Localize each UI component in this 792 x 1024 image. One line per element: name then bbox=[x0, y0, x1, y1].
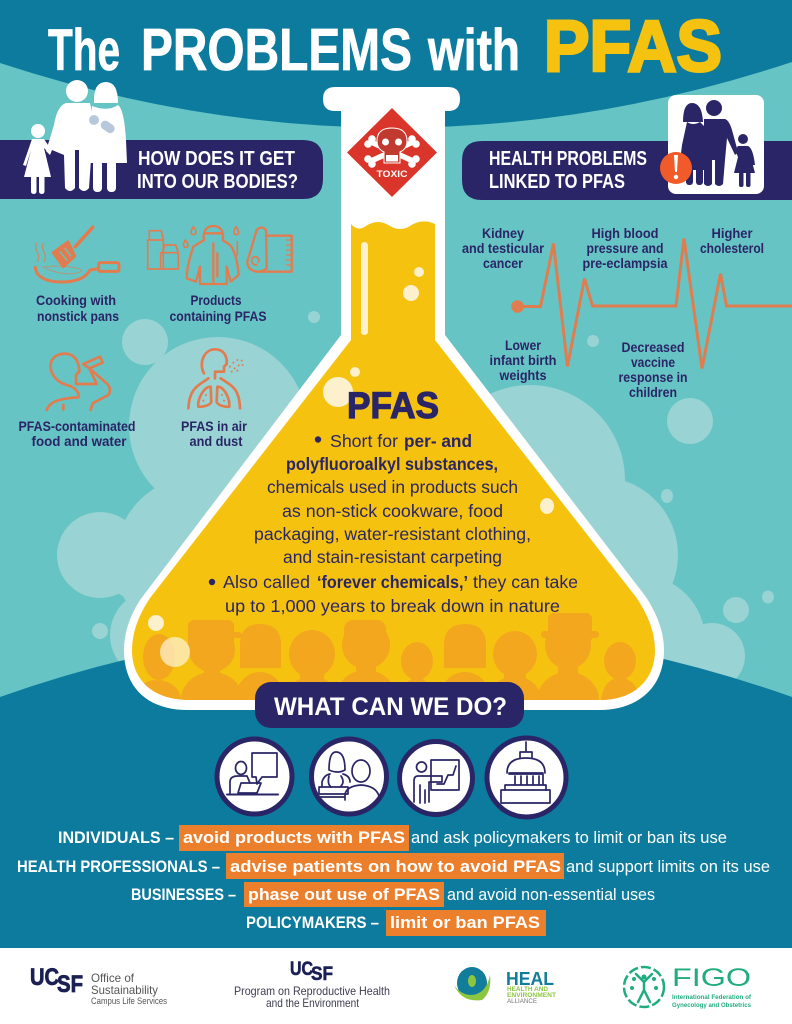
call to action: health professionals bbox=[17, 853, 770, 879]
text block: PFAS definition: as non-stick cookware, food bbox=[282, 501, 503, 521]
icon: health professionals circle bbox=[312, 739, 386, 814]
title: with bbox=[427, 18, 520, 83]
banner: health problems linked to PFAS: HEALTH PROBLEMS bbox=[489, 147, 647, 170]
label: high blood pressure and pre-eclampsia bbox=[582, 225, 668, 271]
call to action: businesses bbox=[131, 882, 655, 907]
logo: UCSF Office of Sustainability: Sustainability bbox=[91, 983, 158, 997]
label: products containing PFAS bbox=[170, 292, 266, 324]
icon: products carton jacket carpet bbox=[148, 226, 293, 284]
label: high blood pressure and pre-eclampsia: pressure and bbox=[586, 240, 664, 256]
icon: nonstick pan bbox=[35, 227, 119, 282]
label: decreased vaccine response: response in bbox=[618, 369, 688, 385]
text block: PFAS definition: polyfluoroalkyl substances, bbox=[286, 454, 498, 474]
flask highlights and bubbles bbox=[148, 242, 554, 667]
banner: how does it get into our bodies bbox=[0, 140, 323, 199]
heading: what can we do bbox=[255, 682, 524, 728]
icon: lungs and head bbox=[188, 349, 244, 408]
logo: FIGO: International Federation of bbox=[672, 994, 752, 1001]
chart: heartbeat line bbox=[511, 238, 792, 368]
call to action: businesses: phase out use of PFAS bbox=[248, 885, 440, 904]
call to action: policymakers bbox=[246, 910, 546, 936]
label: high blood pressure and pre-eclampsia: High blood bbox=[592, 225, 658, 241]
call to action: individuals: avoid products with PFAS bbox=[183, 828, 405, 847]
title: The bbox=[48, 18, 120, 83]
footer background bbox=[0, 948, 792, 1024]
label: lower infant birth weights: Lower bbox=[505, 337, 541, 353]
text block: PFAS definition bbox=[209, 385, 578, 616]
heading: what can we do: WHAT CAN WE DO? bbox=[274, 693, 507, 721]
silhouettes of people in flask bbox=[143, 613, 637, 700]
logo: HEAL alliance: ALLIANCE bbox=[507, 999, 537, 1005]
logo: UCSF Program on Reproductive Health bbox=[234, 959, 390, 1010]
label: lower infant birth weights bbox=[490, 337, 556, 383]
text block: PFAS definition: they can take bbox=[473, 572, 578, 592]
text block: PFAS definition: Also called bbox=[223, 572, 310, 592]
text block: PFAS definition: Short for bbox=[330, 431, 398, 451]
label: PFAS in air and dust bbox=[181, 418, 247, 449]
label: products containing PFAS: containing PFAS bbox=[170, 308, 266, 324]
logo: UCSF Office of Sustainability: Campus Life Services bbox=[91, 996, 167, 1006]
logo: HEAL alliance bbox=[454, 967, 556, 1005]
text block: PFAS definition: PFAS bbox=[347, 385, 439, 426]
text block: PFAS definition: chemicals used in products such bbox=[267, 477, 518, 497]
label: kidney and testicular cancer: Kidney bbox=[482, 225, 524, 241]
text block: PFAS definition: and stain-resistant carpeting bbox=[283, 547, 502, 567]
title bbox=[48, 7, 722, 87]
logo: UCSF Office of Sustainability: Office of bbox=[91, 971, 135, 985]
logo: HEAL alliance: ENVIRONMENT bbox=[507, 993, 556, 999]
icon: individuals circle bbox=[217, 739, 292, 814]
label: PFAS in air and dust: and dust bbox=[190, 433, 243, 449]
logo: FIGO: Gynecology and Obstetrics bbox=[672, 1002, 751, 1009]
label: cooking with nonstick pans: nonstick pans bbox=[37, 308, 119, 324]
label: decreased vaccine response: children bbox=[629, 384, 677, 400]
call to action: policymakers: limit or ban PFAS bbox=[390, 913, 540, 932]
label: higher cholesterol bbox=[700, 225, 764, 256]
call to action: businesses: and avoid non-essential uses bbox=[447, 885, 655, 904]
toxic hazard diamond: TOXIC bbox=[376, 169, 408, 179]
toxic hazard diamond bbox=[347, 108, 437, 197]
background: lower dark teal panel bbox=[0, 627, 792, 948]
call to action: individuals: and ask policymakers to limit or ban its use bbox=[411, 828, 727, 847]
call to action: health professionals: and support limits on its use bbox=[566, 857, 770, 876]
label: decreased vaccine response: vaccine bbox=[631, 354, 675, 370]
text block: PFAS definition: ‘forever chemicals,’ bbox=[317, 572, 468, 592]
logo: UCSF Program on Reproductive Health: Program on Reproductive Health bbox=[234, 984, 390, 998]
label: higher cholesterol: Higher bbox=[712, 225, 753, 241]
label: contaminated food and water bbox=[18, 418, 136, 449]
icon: family silhouette white bbox=[23, 80, 127, 194]
label: contaminated food and water: PFAS-contaminated bbox=[18, 418, 136, 434]
label: kidney and testicular cancer: and testicular bbox=[462, 240, 544, 256]
text block: PFAS definition: packaging, water-resistant clothing, bbox=[254, 524, 531, 544]
logo: UCSF Office of Sustainability: SF bbox=[57, 971, 83, 998]
call to action: policymakers: POLICYMAKERS – bbox=[246, 913, 379, 932]
label: decreased vaccine response: Decreased bbox=[622, 339, 684, 355]
call to action: health professionals: advise patients on how to avoid PFAS bbox=[230, 857, 561, 876]
background: pale cloud and bubbles bbox=[57, 311, 774, 705]
text block: PFAS definition: per- and bbox=[404, 431, 472, 451]
logo: UCSF Office of Sustainability bbox=[30, 964, 167, 1006]
logo: FIGO bbox=[624, 964, 752, 1009]
flask liquid bbox=[132, 221, 655, 730]
icon: person drinking bbox=[47, 354, 110, 410]
label: higher cholesterol: cholesterol bbox=[700, 240, 764, 256]
label: kidney and testicular cancer bbox=[462, 225, 544, 271]
label: products containing PFAS: Products bbox=[190, 292, 242, 308]
banner: health problems linked to PFAS bbox=[462, 141, 792, 200]
title: PFAS bbox=[544, 7, 722, 87]
panel: exposure routes icons bbox=[35, 226, 293, 410]
title: PROBLEMS bbox=[141, 17, 412, 83]
label: cooking with nonstick pans bbox=[36, 292, 119, 324]
call to action: individuals: INDIVIDUALS – bbox=[58, 828, 174, 847]
logo: UCSF Program on Reproductive Health: UC bbox=[290, 959, 313, 980]
logo: UCSF Office of Sustainability: UC bbox=[30, 964, 59, 991]
label: kidney and testicular cancer: cancer bbox=[483, 255, 523, 271]
flask outline bbox=[124, 87, 664, 710]
label: lower infant birth weights: infant birth bbox=[490, 352, 556, 368]
call to action: health professionals: HEALTH PROFESSIONALS – bbox=[17, 857, 220, 876]
icon: policymakers capitol circle bbox=[487, 738, 566, 817]
logo: UCSF Program on Reproductive Health: and the Environment bbox=[266, 996, 360, 1010]
call to action: businesses: BUSINESSES – bbox=[131, 885, 236, 904]
label: cooking with nonstick pans: Cooking with bbox=[36, 292, 116, 308]
logo: HEAL alliance: HEAL bbox=[506, 969, 554, 989]
background: top dark teal curve bbox=[0, 0, 792, 128]
label: decreased vaccine response bbox=[618, 339, 688, 400]
label: contaminated food and water: food and water bbox=[32, 433, 127, 449]
text block: PFAS definition: up to 1,000 years to break down in nature bbox=[225, 596, 560, 616]
logo: FIGO: FIGO bbox=[672, 964, 751, 992]
banner: health problems linked to PFAS: LINKED TO PFAS bbox=[489, 170, 625, 193]
label: lower infant birth weights: weights bbox=[499, 367, 547, 383]
label: high blood pressure and pre-eclampsia: pre-eclampsia bbox=[582, 255, 668, 271]
call to action: individuals bbox=[58, 825, 727, 851]
icon: family with warning sign bbox=[660, 95, 764, 194]
logo: UCSF Program on Reproductive Health: SF bbox=[311, 964, 333, 985]
logo: HEAL alliance: HEALTH AND bbox=[507, 987, 549, 993]
banner: how does it get into our bodies: INTO OUR BODIES? bbox=[137, 170, 298, 193]
label: PFAS in air and dust: PFAS in air bbox=[181, 418, 247, 434]
banner: how does it get into our bodies: HOW DOES IT GET bbox=[138, 147, 295, 170]
icon: businesses circle bbox=[400, 742, 472, 814]
